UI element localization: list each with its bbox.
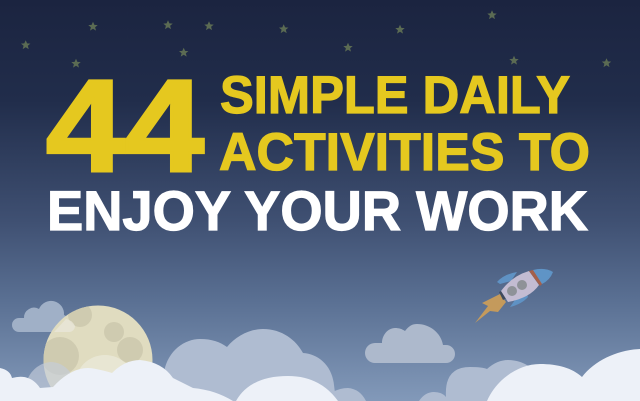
moon craters <box>44 306 143 372</box>
cloud: back right <box>419 360 530 401</box>
rocket band <box>529 270 543 286</box>
cloud: front left <box>0 360 233 401</box>
rocket body <box>501 271 539 302</box>
cloud: small low centre <box>333 388 366 401</box>
cloud: large back centre <box>163 329 336 401</box>
number 44: 44 <box>46 52 204 199</box>
moon <box>44 306 152 388</box>
headline line: activities to: ACTIVITIES TO <box>219 123 590 182</box>
cloud: overlap highlight on moon <box>54 319 75 332</box>
rocket fins <box>497 272 517 284</box>
rocket flame <box>475 294 506 323</box>
cloud: far upper left <box>12 301 76 332</box>
headline line: simple daily: SIMPLE DAILY <box>220 66 570 125</box>
rocket nose <box>533 269 553 284</box>
icon: rocket <box>475 269 553 323</box>
rocket windows <box>507 286 517 296</box>
cloud: behind moon <box>28 362 70 401</box>
stars <box>21 10 611 68</box>
headline line: enjoy your work: ENJOY YOUR WORK <box>47 179 588 242</box>
rocket nozzle <box>499 290 507 300</box>
cloud: middle floating <box>365 324 455 363</box>
cloud: front centre <box>236 376 338 401</box>
title <box>46 52 590 242</box>
cloud: front right <box>487 349 640 401</box>
